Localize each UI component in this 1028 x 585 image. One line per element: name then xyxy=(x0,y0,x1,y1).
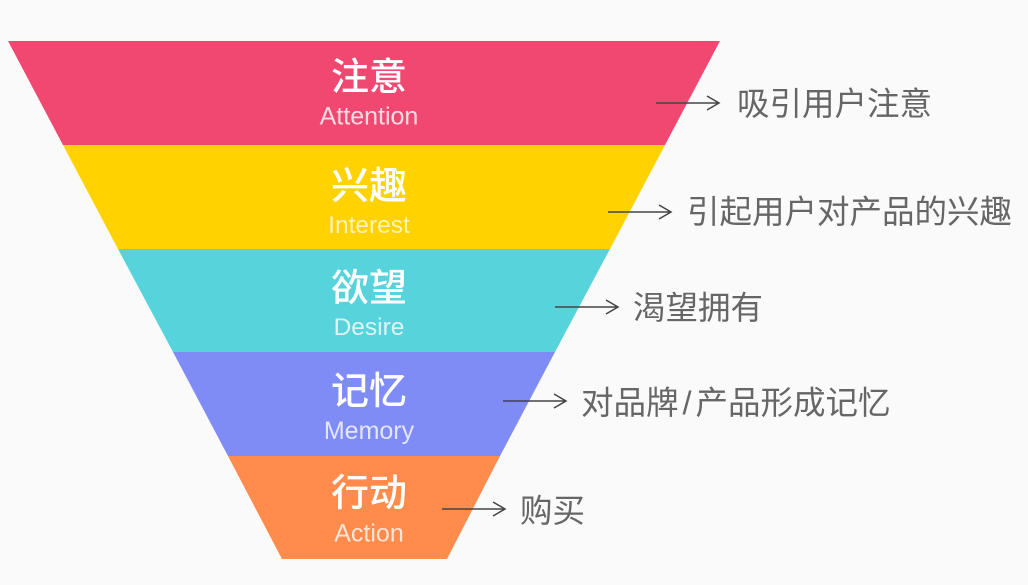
label: memory: 对品牌/产品形成记忆 xyxy=(581,385,891,421)
funnel layer: attention xyxy=(8,41,720,145)
arrow: memory xyxy=(503,394,566,408)
funnel layer: desire: 欲望 xyxy=(331,268,407,310)
funnel layer: action: Action xyxy=(334,520,404,548)
funnel layer: interest: Interest xyxy=(328,212,410,239)
funnel layer: desire xyxy=(118,249,610,352)
label: interest: 引起用户对产品的兴趣 xyxy=(687,194,1012,230)
arrow: action xyxy=(442,502,505,516)
arrow: attention xyxy=(656,96,719,110)
funnel layer: interest: 兴趣 xyxy=(331,166,407,208)
arrow: interest xyxy=(608,205,671,219)
label: action: 购买 xyxy=(520,493,585,529)
funnel layer: memory xyxy=(173,352,555,456)
arrow: desire xyxy=(555,300,618,314)
funnel layer: action: 行动 xyxy=(331,473,407,515)
funnel layer: action xyxy=(228,456,500,559)
label: desire: 渴望拥有 xyxy=(633,290,763,326)
funnel layer: attention: Attention xyxy=(320,102,418,130)
funnel layer: desire: Desire xyxy=(334,314,404,341)
funnel layer: memory: 记忆 xyxy=(331,371,407,413)
funnel layer: interest xyxy=(63,145,665,249)
funnel layer: attention: 注意 xyxy=(331,57,407,99)
label: attention: 吸引用户注意 xyxy=(737,86,932,122)
funnel layer: memory: Memory xyxy=(324,417,415,445)
